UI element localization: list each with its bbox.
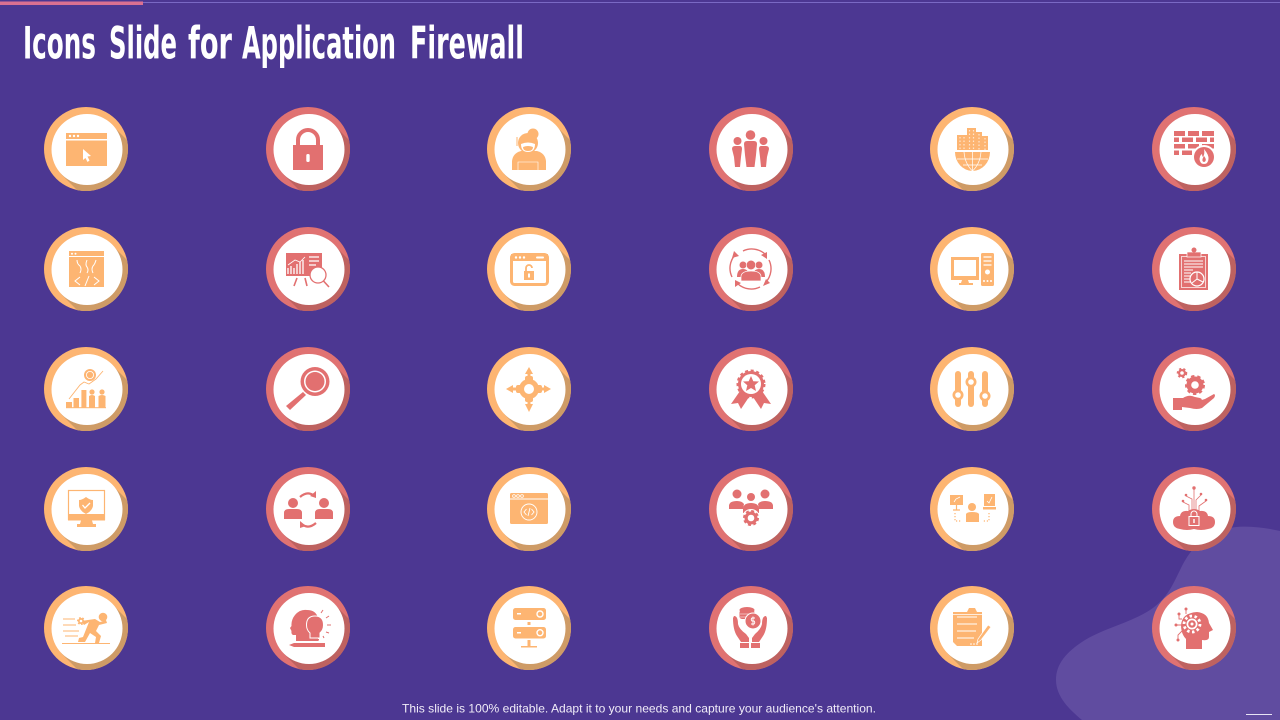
decorative blob (1056, 527, 1280, 720)
badge: code window circle (487, 467, 571, 551)
badge: team gear (709, 467, 793, 551)
badge: directional arrows (487, 347, 571, 431)
icon: growth chart (66, 369, 106, 408)
top rule (0, 2, 1280, 5)
badge: hacker (487, 107, 571, 191)
icon: unlocked window (511, 254, 548, 284)
badge: checklist (930, 586, 1014, 670)
icon: clipboard report (1179, 248, 1208, 290)
badge: brick wall on fire (1152, 107, 1236, 191)
icon: code window circle (510, 493, 548, 524)
badge: head with gear (1152, 586, 1236, 670)
icon: sliders (952, 371, 990, 407)
icon: hand with gears (1173, 369, 1215, 410)
icon: checklist (953, 608, 991, 646)
icon: award rosette (731, 371, 771, 409)
badge: growth chart (44, 347, 128, 431)
icon: directional arrows (506, 367, 551, 412)
title: Slide (109, 18, 177, 70)
icon: presentation analysis (286, 253, 329, 287)
icon: buildings on globe (955, 128, 990, 171)
badge: buildings on globe (930, 107, 1014, 191)
icon: browser cursor (66, 133, 107, 166)
badge: code window (44, 227, 128, 311)
badge: hands with coins (709, 586, 793, 670)
icon: runner (62, 613, 110, 644)
badge: desktop computer (930, 227, 1014, 311)
badge: sliders (930, 347, 1014, 431)
badge: people exchange (266, 467, 350, 551)
icon: padlock (293, 130, 323, 170)
icon: monitor shield (68, 490, 105, 527)
icon: magnifier (286, 367, 330, 410)
badge: padlock (266, 107, 350, 191)
icon: head with gear (1174, 608, 1213, 649)
title: Application (242, 18, 396, 70)
badge: award rosette (709, 347, 793, 431)
badge: browser cursor (44, 107, 128, 191)
icon: cloud lock (1173, 486, 1215, 530)
badge: hand with gears (1152, 347, 1236, 431)
badge: presentation analysis (266, 227, 350, 311)
footer note: This slide is 100% editable. Adapt it to your needs and capture your audience's attention. (402, 702, 876, 716)
badge: server network (487, 586, 571, 670)
badge: unlocked window (487, 227, 571, 311)
badge: head with bulb (266, 586, 350, 670)
icon: brick wall on fire (1174, 131, 1216, 169)
badge: monitor shield (44, 467, 128, 551)
icon: team cycle (730, 249, 771, 289)
badge: team cycle (709, 227, 793, 311)
icon: people exchange (284, 491, 333, 528)
title: for (188, 18, 232, 70)
badge: clipboard report (1152, 227, 1236, 311)
badge: cloud lock (1152, 467, 1236, 551)
slide number rule (1246, 714, 1272, 715)
icon: desktop computer (951, 253, 994, 286)
icon: hands with coins (733, 607, 767, 648)
icon: team gear (729, 490, 773, 527)
badge: person with check screens (930, 467, 1014, 551)
badge: runner (44, 586, 128, 670)
icon: person with check screens (950, 494, 996, 522)
title: Icons (23, 18, 96, 70)
icon: hacker (512, 128, 546, 170)
badge: team of three (709, 107, 793, 191)
icon: code window (69, 251, 104, 287)
icon: head with bulb (289, 610, 331, 647)
icon: server network (513, 608, 546, 648)
icon: team of three (732, 130, 769, 167)
badge: magnifier (266, 347, 350, 431)
title: Firewall (410, 18, 524, 70)
